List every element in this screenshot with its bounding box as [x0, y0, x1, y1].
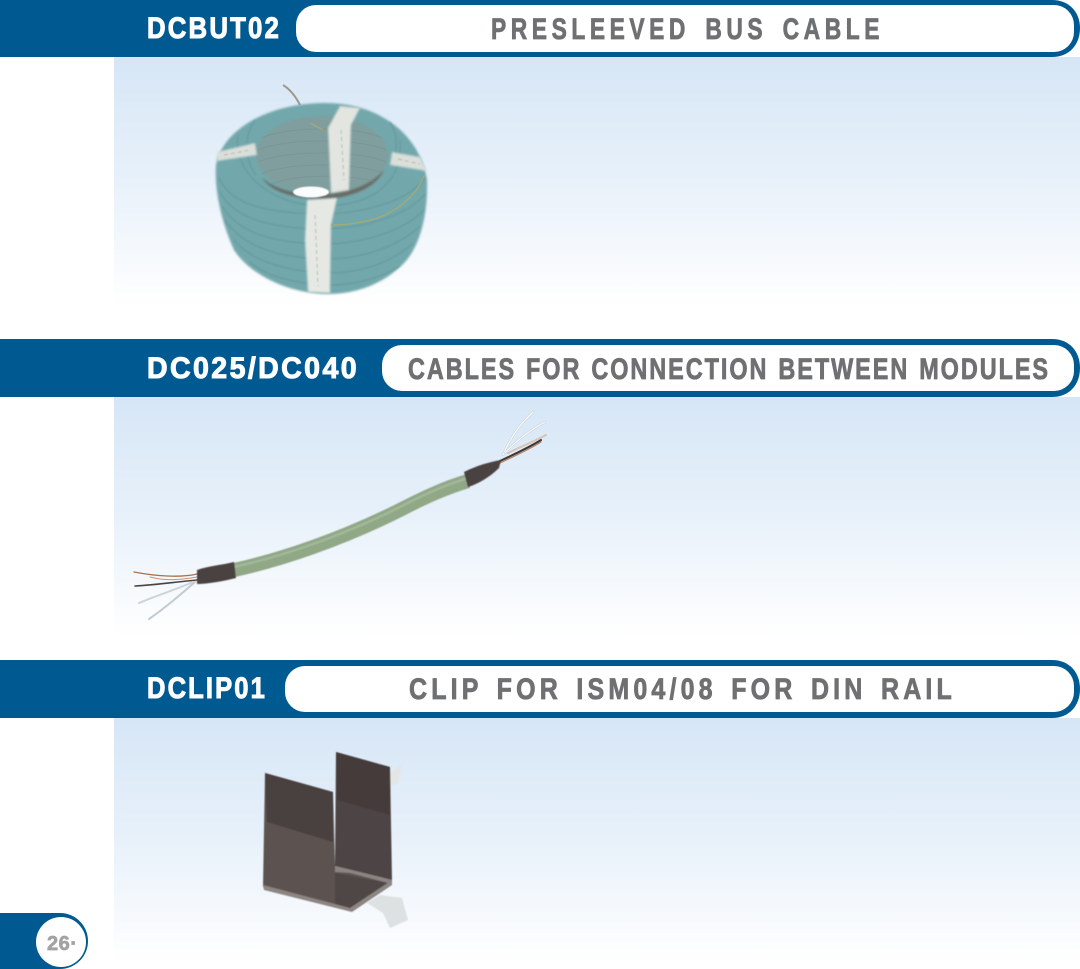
image: DIN rail clip: [263, 752, 408, 928]
panel: background gradient DCBUT02: [114, 57, 1080, 307]
tape markings: [224, 130, 420, 286]
product title: presleeved bus cable: PRESLEEVED BUS CABLE: [491, 13, 884, 46]
right upright: [335, 752, 392, 880]
product code: DCBUT02: DCBUT02: [147, 12, 281, 45]
product code: DCLIP01: DCLIP01: [147, 672, 267, 705]
dark sleeves: [197, 460, 501, 584]
header: DCBUT02: [0, 0, 1080, 57]
inner white hole: [293, 186, 329, 198]
tape: right: [390, 152, 427, 171]
image: module connection cable: [134, 412, 546, 619]
product title: clip for ISM04/08 for DIN rail: CLIP FOR ISM04/08 FOR DIN RAIL: [409, 673, 956, 706]
image: cable coil: [216, 85, 427, 294]
page number: 26·: [47, 933, 77, 955]
panel: background gradient DC025/DC040: [114, 397, 1080, 637]
tape: left: [217, 143, 257, 161]
header: DC025/DC040: [0, 339, 1080, 397]
right wires: [500, 412, 546, 463]
left wires: [134, 572, 197, 619]
clip body: [263, 752, 392, 912]
green sheath: [234, 478, 468, 570]
product code: DC025/DC040: DC025/DC040: [147, 352, 359, 385]
tape: bottom: [305, 198, 337, 293]
clip tabs: [367, 763, 408, 928]
tape: top: [328, 106, 360, 193]
panel: background gradient DCLIP01: [114, 718, 1080, 963]
footer: page number badge: [0, 913, 88, 969]
header: DCLIP01: [0, 660, 1080, 718]
left face: [263, 773, 392, 910]
